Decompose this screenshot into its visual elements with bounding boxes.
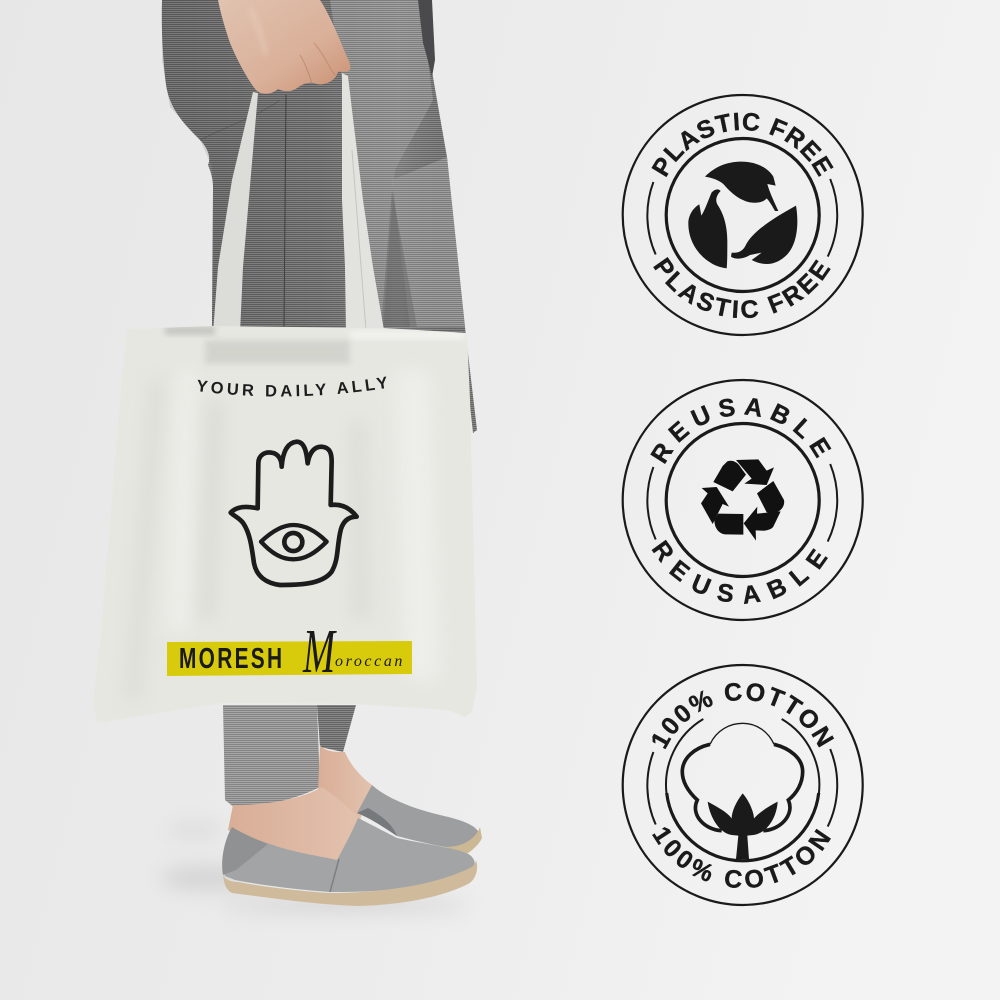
badge: plastic free: PLASTIC FREE: [653, 257, 831, 318]
badge: 100% cotton: [622, 664, 864, 906]
badge: 100% cotton: 100% COTTON: [652, 682, 834, 750]
icon: recycling arrows: [701, 459, 784, 541]
espadrille sole: [223, 860, 477, 906]
icon: hamsa hand: [231, 442, 357, 585]
badge: reusable: [622, 378, 864, 622]
icon: cotton boll: [682, 723, 803, 859]
front foot: [228, 787, 362, 864]
badge: reusable: REUSABLE: [650, 398, 832, 464]
trousers lower: [223, 705, 356, 808]
badge: reusable: REUSABLE: [652, 540, 828, 604]
badge: plastic free: [622, 94, 864, 336]
back foot: [318, 745, 372, 820]
badge: plastic free: PLASTIC FREE: [652, 112, 834, 178]
hem: [205, 340, 350, 364]
tagline: YOUR DAILY ALLY: [198, 376, 386, 396]
icon: three leaves: [688, 162, 797, 268]
back shoe: [357, 785, 482, 854]
script brand name: oroccan: [335, 653, 405, 670]
person holding bag: [160, 0, 482, 910]
trousers upper: [162, 0, 477, 433]
front shoe: [222, 818, 477, 906]
pocket: [418, 0, 435, 77]
hand: [218, 0, 350, 94]
script brand name: M: [302, 618, 337, 686]
yellow brand strip: [167, 641, 412, 676]
script brand name: [302, 618, 405, 686]
floor shadow under shoes: [160, 820, 470, 910]
badge: 100% cotton: 100% COTTON: [652, 827, 831, 888]
brand name: MORESH: [179, 643, 284, 675]
tote bag: [106, 326, 477, 718]
bag handles and back panel: [213, 73, 384, 333]
